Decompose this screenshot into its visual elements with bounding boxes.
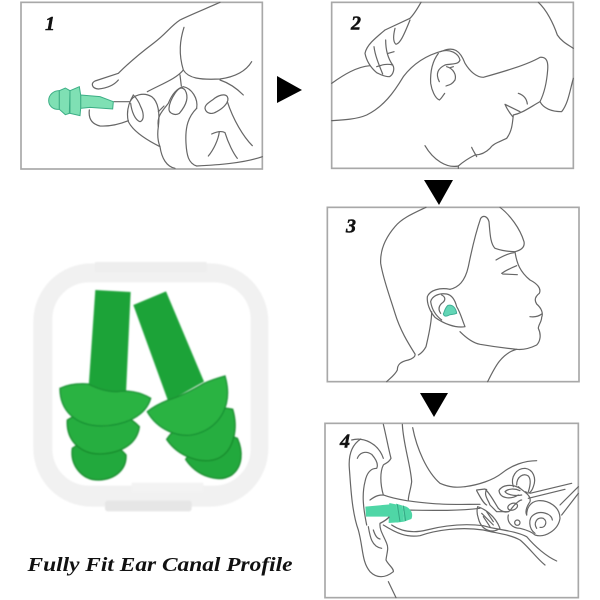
icon: earplug in ear	[443, 305, 457, 316]
illustration: head profile with earplug inserted	[381, 207, 542, 382]
transparent case	[33, 262, 268, 511]
arrow: step 3 to 4	[420, 393, 448, 417]
illustration: fingers holding earplug	[89, 2, 262, 168]
left earplug	[60, 290, 151, 480]
step number 3: 3	[345, 216, 356, 238]
arrow: step 2 to 3	[424, 180, 453, 205]
step number 1: 1	[45, 13, 55, 35]
panel: step 1	[21, 2, 262, 169]
panel: step 2	[332, 2, 573, 168]
step number 4: 4	[339, 430, 350, 452]
icon: earplug in ear canal	[365, 503, 412, 523]
illustration: ear canal cross-section	[349, 424, 578, 598]
inner ear	[465, 461, 578, 536]
step number 2: 2	[350, 12, 361, 34]
arrow: step 1 to 2	[277, 76, 302, 103]
photo: case with green earplugs	[33, 262, 268, 511]
illustration: head tilted with hand pulling ear	[332, 2, 573, 168]
icon: green earplug	[49, 87, 113, 116]
caption: Fully Fit Ear Canal Profile	[26, 555, 293, 576]
right earplug	[133, 291, 241, 478]
panel: step 4	[325, 423, 578, 598]
panel: step 3	[327, 207, 579, 382]
